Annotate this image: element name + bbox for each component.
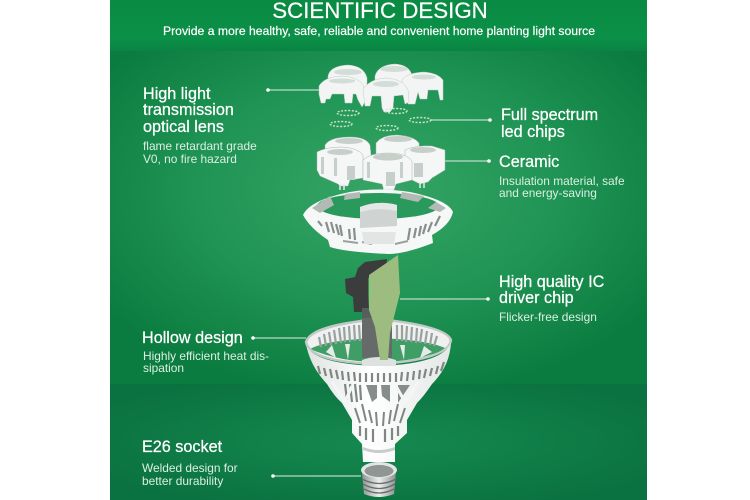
text block: optical lens: V0, no fire hazard xyxy=(143,152,237,166)
text block: hollow design xyxy=(142,329,269,375)
text block: hollow design: Highly efficient heat dis- xyxy=(143,349,269,363)
text block: IC driver chip: High quality IC xyxy=(499,273,605,291)
text block: optical lens xyxy=(143,85,257,166)
icon: optical lens cluster xyxy=(319,64,443,112)
text block: hollow design: Hollow design xyxy=(142,329,243,347)
text block: optical lens: transmission xyxy=(143,101,234,119)
text block: optical lens: flame retardant grade xyxy=(143,139,257,153)
icon: driver heat sink block xyxy=(345,259,387,342)
subtitle: Provide a more healthy, safe, reliable and convenient home planting light source xyxy=(163,24,595,38)
icon: led chips xyxy=(330,108,431,130)
text block: IC driver chip xyxy=(499,273,605,324)
text block: IC driver chip: driver chip xyxy=(499,289,574,307)
panel: green background xyxy=(110,0,647,500)
text block: hollow design: sipation xyxy=(143,361,184,375)
icon: E26 screw socket xyxy=(361,462,397,497)
text block: socket: better durability xyxy=(142,474,223,488)
text block: ceramic: and energy-saving xyxy=(499,186,597,200)
icon: IC driver board xyxy=(369,255,400,360)
text block: optical lens: High light xyxy=(143,85,211,103)
icon: hollow heat sink xyxy=(306,318,451,462)
text block: ceramic xyxy=(499,153,625,200)
text block: socket: E26 socket xyxy=(142,438,223,456)
text block: ceramic: Insulation material, safe xyxy=(499,174,625,188)
text block: socket xyxy=(142,438,238,488)
text block: led chips: led chips xyxy=(501,123,565,141)
text block: socket: Welded design for xyxy=(142,461,238,475)
text block: led chips xyxy=(501,106,598,141)
text block: optical lens: optical lens xyxy=(143,118,224,136)
icon: white ring housing xyxy=(303,190,453,254)
text block: led chips: Full spectrum xyxy=(501,106,598,124)
leader lines xyxy=(251,88,492,478)
text block: ceramic: Ceramic xyxy=(499,153,559,171)
icon: ceramic base xyxy=(317,135,445,197)
text block: IC driver chip: Flicker-free design xyxy=(499,310,597,324)
